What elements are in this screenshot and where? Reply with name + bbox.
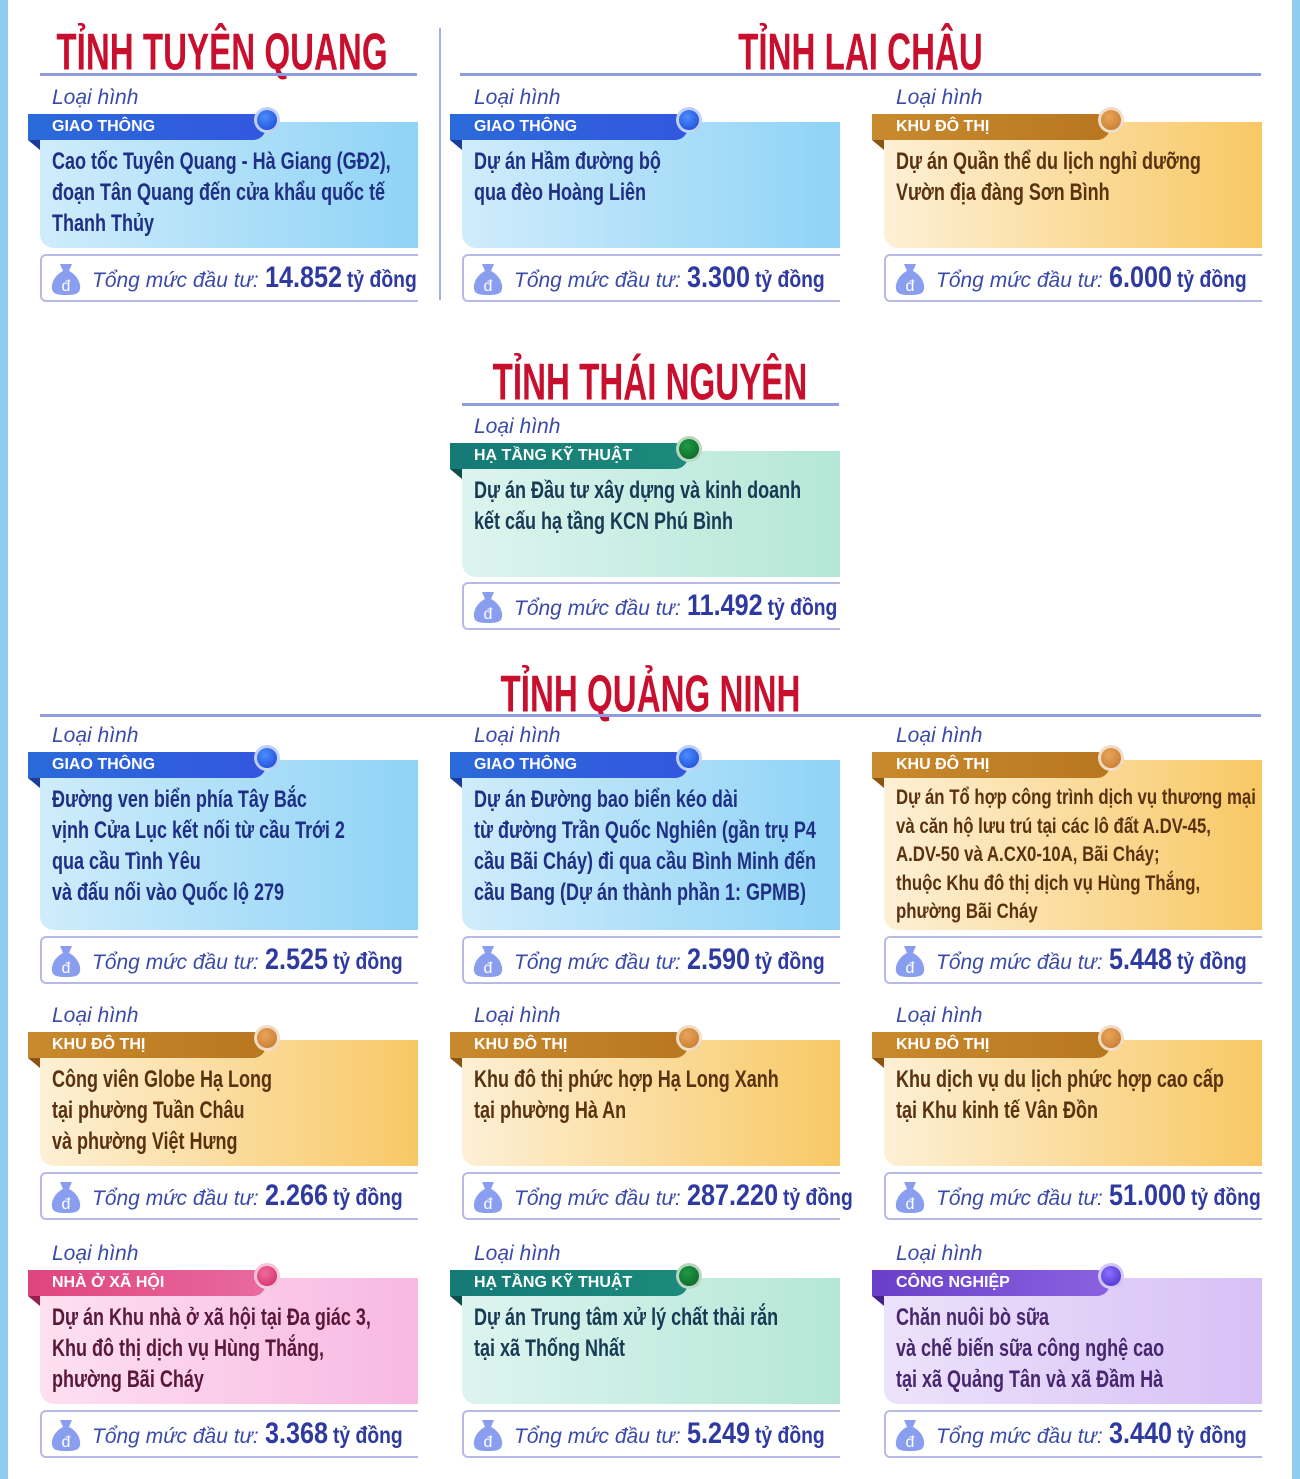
card: Nhà ở xã hội: NHÀ Ở XÃ HỘI bbox=[52, 1274, 164, 1291]
card: Nhà ở xã hội: phường Bãi Cháy bbox=[52, 1366, 204, 1393]
card: Cao tốc Tuyên Quang: Loại hình bbox=[52, 86, 138, 109]
card: Cao tốc Tuyên Quang: đ bbox=[62, 278, 71, 295]
card: Chất thải rắn: đ bbox=[484, 1434, 493, 1451]
card: Vân Đồn: 51.000 tỷ đồng bbox=[1109, 1179, 1260, 1212]
card: Quần thể du lịch: KHU ĐÔ THỊ bbox=[896, 118, 989, 135]
card: Chất thải rắn: tại xã Thống Nhất bbox=[474, 1335, 625, 1362]
card: KCN Phú Bình: Loại hình bbox=[474, 415, 560, 438]
card: Quần thể du lịch: Vườn địa đàng Sơn Bình bbox=[896, 179, 1110, 206]
card: Công viên Globe: Loại hình bbox=[52, 1004, 138, 1027]
card: Nhà ở xã hội: Dự án Khu nhà ở xã hội tại Đa giác 3, bbox=[52, 1304, 371, 1331]
card: Bò sữa: và chế biến sữa công nghệ cao bbox=[896, 1335, 1164, 1362]
card: Hạ Long Xanh: Tổng mức đầu tư: bbox=[514, 1187, 681, 1210]
title: Thái Nguyên: TỈNH THÁI NGUYÊN bbox=[493, 353, 807, 411]
card: Hạ Long Xanh: Khu đô thị phức hợp Hạ Long Xanh bbox=[474, 1066, 779, 1093]
card: Hạ Long Xanh: đ bbox=[484, 1196, 493, 1213]
card: Chất thải rắn: HẠ TẦNG KỸ THUẬT bbox=[474, 1274, 632, 1291]
card: Tổ hợp công trình dịch vụ: 5.448 tỷ đồng bbox=[1109, 943, 1246, 976]
card: Đường ven biển: qua cầu Tình Yêu bbox=[52, 848, 201, 875]
card: Vân Đồn: Loại hình bbox=[896, 1004, 982, 1027]
card: Vân Đồn: Tổng mức đầu tư: bbox=[936, 1187, 1103, 1210]
card: Cao tốc Tuyên Quang: Tổng mức đầu tư: bbox=[92, 269, 259, 292]
card: Hầm đường bộ: đ bbox=[484, 278, 493, 295]
card: Tổ hợp công trình dịch vụ: thuộc Khu đô thị dịch vụ Hùng Thắng, bbox=[896, 872, 1200, 894]
card: Nhà ở xã hội bbox=[28, 1242, 418, 1458]
card: Hạ Long Xanh: Loại hình bbox=[474, 1004, 560, 1027]
card: KCN Phú Bình: 11.492 tỷ đồng bbox=[687, 589, 837, 622]
card: Cao tốc Tuyên Quang: Thanh Thủy bbox=[52, 210, 154, 237]
card: Đường bao biển: Dự án Đường bao biển kéo dài bbox=[474, 786, 738, 813]
card: Đường ven biển bbox=[28, 724, 418, 984]
card: Chất thải rắn bbox=[450, 1242, 840, 1458]
card: Công viên Globe bbox=[28, 1004, 418, 1220]
card: Công viên Globe: đ bbox=[62, 1196, 71, 1213]
card: Vân Đồn: KHU ĐÔ THỊ bbox=[896, 1036, 989, 1053]
card: Vân Đồn: Khu dịch vụ du lịch phức hợp cao cấp bbox=[896, 1066, 1224, 1093]
card: Đường ven biển: đ bbox=[62, 960, 71, 977]
card: Hầm đường bộ: 3.300 tỷ đồng bbox=[687, 261, 824, 294]
card: Bò sữa: CÔNG NGHIỆP bbox=[896, 1274, 1010, 1291]
card: Tổ hợp công trình dịch vụ: Loại hình bbox=[896, 724, 982, 747]
card: Vân Đồn: đ bbox=[906, 1196, 915, 1213]
title: Quảng Ninh: TỈNH QUẢNG NINH bbox=[501, 665, 800, 723]
card: KCN Phú Bình: kết cấu hạ tầng KCN Phú Bình bbox=[474, 508, 733, 535]
card: Hầm đường bộ: Tổng mức đầu tư: bbox=[514, 269, 681, 292]
card: Hầm đường bộ: qua đèo Hoàng Liên bbox=[474, 179, 646, 206]
card: Hạ Long Xanh: KHU ĐÔ THỊ bbox=[474, 1036, 567, 1053]
card: Cao tốc Tuyên Quang: 14.852 tỷ đồng bbox=[265, 261, 416, 294]
card: Tổ hợp công trình dịch vụ: Tổng mức đầu tư: bbox=[936, 951, 1103, 974]
card: Cao tốc Tuyên Quang: Cao tốc Tuyên Quang - Hà Giang (GĐ2), bbox=[52, 148, 391, 175]
card: KCN Phú Bình: Tổng mức đầu tư: bbox=[514, 597, 681, 620]
card: Tổ hợp công trình dịch vụ: Dự án Tổ hợp công trình dịch vụ thương mại bbox=[896, 786, 1256, 809]
card: Đường bao biển bbox=[450, 724, 840, 984]
card: Hạ Long Xanh: tại phường Hà An bbox=[474, 1097, 626, 1124]
title: Lai Châu: TỈNH LAI CHÂU bbox=[738, 23, 983, 81]
card: Công viên Globe: và phường Việt Hưng bbox=[52, 1128, 238, 1155]
card: Hạ Long Xanh: 287.220 tỷ đồng bbox=[687, 1179, 852, 1212]
card: Tổ hợp công trình dịch vụ bbox=[872, 724, 1262, 984]
card: Quần thể du lịch: Dự án Quần thể du lịch nghỉ dưỡng bbox=[896, 148, 1201, 175]
card: Quần thể du lịch: Loại hình bbox=[896, 86, 982, 109]
card: KCN Phú Bình: HẠ TẦNG KỸ THUẬT bbox=[474, 447, 632, 464]
card: Công viên Globe: 2.266 tỷ đồng bbox=[265, 1179, 402, 1212]
card: Tổ hợp công trình dịch vụ: phường Bãi Cháy bbox=[896, 900, 1038, 923]
card: Quần thể du lịch: đ bbox=[906, 278, 915, 295]
card: Bò sữa bbox=[872, 1242, 1262, 1458]
card: Công viên Globe: Tổng mức đầu tư: bbox=[92, 1187, 259, 1210]
card: Nhà ở xã hội: Tổng mức đầu tư: bbox=[92, 1425, 259, 1448]
card: Vân Đồn: tại Khu kinh tế Vân Đồn bbox=[896, 1097, 1098, 1124]
card: Hầm đường bộ bbox=[450, 86, 840, 302]
card: Đường ven biển: vịnh Cửa Lục kết nối từ cầu Trới 2 bbox=[52, 817, 345, 844]
card: Công viên Globe: KHU ĐÔ THỊ bbox=[52, 1036, 145, 1053]
card: Bò sữa: Tổng mức đầu tư: bbox=[936, 1425, 1103, 1448]
card: Đường bao biển: Tổng mức đầu tư: bbox=[514, 951, 681, 974]
card: Hạ Long Xanh bbox=[450, 1004, 852, 1220]
card: Công viên Globe: tại phường Tuần Châu bbox=[52, 1097, 244, 1124]
card: Tổ hợp công trình dịch vụ: và căn hộ lưu trú tại các lô đất A.DV-45, bbox=[896, 814, 1211, 838]
card: Hầm đường bộ: Dự án Hầm đường bộ bbox=[474, 148, 661, 175]
card: Tổ hợp công trình dịch vụ: A.DV-50 và A.CX0-10A, Bãi Cháy; bbox=[896, 843, 1160, 866]
card: Chất thải rắn: Loại hình bbox=[474, 1242, 560, 1265]
card: Đường ven biển: Đường ven biển phía Tây Bắc bbox=[52, 786, 307, 813]
card: Đường bao biển: 2.590 tỷ đồng bbox=[687, 943, 824, 976]
card: Nhà ở xã hội: Loại hình bbox=[52, 1242, 138, 1265]
card: KCN Phú Bình bbox=[450, 415, 840, 630]
title: Tuyên Quang: TỈNH TUYÊN QUANG bbox=[56, 23, 388, 81]
card: Vân Đồn bbox=[872, 1004, 1262, 1220]
card: Đường ven biển: Tổng mức đầu tư: bbox=[92, 951, 259, 974]
card: Đường bao biển: cầu Bang (Dự án thành phần 1: GPMB) bbox=[474, 879, 806, 906]
card: Cao tốc Tuyên Quang: GIAO THÔNG bbox=[52, 118, 155, 135]
card: Hầm đường bộ: GIAO THÔNG bbox=[474, 118, 577, 135]
card: Đường ven biển: 2.525 tỷ đồng bbox=[265, 943, 402, 976]
card: Cao tốc Tuyên Quang bbox=[28, 86, 418, 302]
card: Chất thải rắn: Tổng mức đầu tư: bbox=[514, 1425, 681, 1448]
card: Đường bao biển: đ bbox=[484, 960, 493, 977]
card: Nhà ở xã hội: Khu đô thị dịch vụ Hùng Thắng, bbox=[52, 1335, 324, 1362]
card: KCN Phú Bình: Dự án Đầu tư xây dựng và kinh doanh bbox=[474, 477, 801, 504]
card: Nhà ở xã hội: 3.368 tỷ đồng bbox=[265, 1417, 402, 1450]
card: Quần thể du lịch: Tổng mức đầu tư: bbox=[936, 269, 1103, 292]
card: Nhà ở xã hội: đ bbox=[62, 1434, 71, 1451]
card: Chất thải rắn: Dự án Trung tâm xử lý chất thải rắn bbox=[474, 1304, 778, 1331]
card: Đường bao biển: từ đường Trần Quốc Nghiên (gần trụ P4 bbox=[474, 817, 816, 844]
card: Đường ven biển: Loại hình bbox=[52, 724, 138, 747]
card: Cao tốc Tuyên Quang: đoạn Tân Quang đến cửa khẩu quốc tế bbox=[52, 179, 385, 206]
card: Bò sữa: tại xã Quảng Tân và xã Đầm Hà bbox=[896, 1366, 1163, 1393]
card: Bò sữa: Loại hình bbox=[896, 1242, 982, 1265]
card: Tổ hợp công trình dịch vụ: đ bbox=[906, 960, 915, 977]
card: Quần thể du lịch bbox=[872, 86, 1262, 302]
card: Đường ven biển: và đấu nối vào Quốc lộ 279 bbox=[52, 879, 284, 906]
card: Đường bao biển: Loại hình bbox=[474, 724, 560, 747]
card: Quần thể du lịch: 6.000 tỷ đồng bbox=[1109, 261, 1246, 294]
card: Bò sữa: đ bbox=[906, 1434, 915, 1451]
card: Bò sữa: Chăn nuôi bò sữa bbox=[896, 1304, 1049, 1331]
card: Bò sữa: 3.440 tỷ đồng bbox=[1109, 1417, 1246, 1450]
card: Tổ hợp công trình dịch vụ: KHU ĐÔ THỊ bbox=[896, 756, 989, 773]
card: Đường ven biển: GIAO THÔNG bbox=[52, 756, 155, 773]
card: Hầm đường bộ: Loại hình bbox=[474, 86, 560, 109]
card: Chất thải rắn: 5.249 tỷ đồng bbox=[687, 1417, 824, 1450]
card: Công viên Globe: Công viên Globe Hạ Long bbox=[52, 1066, 272, 1093]
card: Đường bao biển: cầu Bãi Cháy) đi qua cầu Bình Minh đến bbox=[474, 848, 816, 875]
card: Đường bao biển: GIAO THÔNG bbox=[474, 756, 577, 773]
card: KCN Phú Bình: đ bbox=[484, 606, 493, 623]
